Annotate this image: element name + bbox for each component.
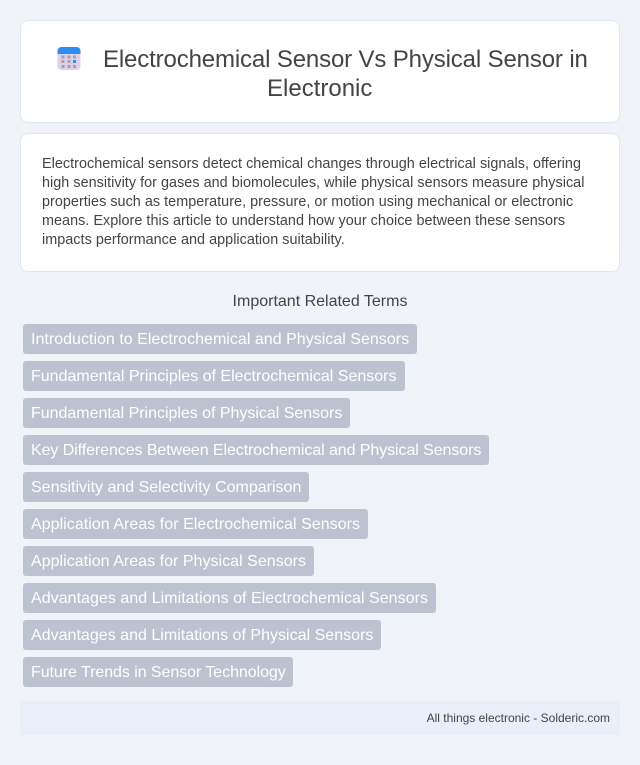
tag 2 — [23, 361, 405, 391]
tag 9 — [23, 620, 381, 650]
tag 8: Advantages and Limitations of Electrochemical Sensors — [31, 590, 428, 607]
tag 7: Application Areas for Physical Sensors — [31, 553, 306, 570]
list: related term tags — [23, 324, 489, 687]
panel: title card — [20, 20, 620, 123]
tag 2: Fundamental Principles of Electrochemical Sensors — [31, 368, 396, 385]
text block: intro: means. Explore this article to understand how your choice between these sensors — [42, 213, 565, 229]
tag 5: Sensitivity and Selectivity Comparison — [31, 479, 301, 496]
panel: intro card — [20, 133, 620, 272]
title: Electrochemical Sensor Vs Physical Sensor in — [103, 46, 588, 73]
tag 4 — [23, 435, 489, 465]
tag 10: Future Trends in Sensor Technology — [31, 664, 286, 681]
heading: related terms: Important Related Terms — [233, 293, 407, 310]
text block: intro — [42, 156, 584, 248]
tag 10 — [23, 657, 293, 687]
text block: intro: high sensitivity for gases and biomolecules, while physical sensors measure physical — [42, 175, 584, 191]
tag 3 — [23, 398, 350, 428]
footer — [20, 701, 620, 735]
title: Electronic — [267, 75, 372, 102]
title — [103, 46, 588, 102]
tag 5 — [23, 472, 309, 502]
text block: intro: impacts performance and application suitability. — [42, 232, 345, 248]
tag 8 — [23, 583, 436, 613]
tag 4: Key Differences Between Electrochemical and Physical Sensors — [31, 442, 481, 459]
text block: intro: Electrochemical sensors detect chemical changes through electrical signals, offering — [42, 156, 581, 172]
tag 6 — [23, 509, 368, 539]
footer: All things electronic - Solderic.com — [427, 711, 610, 725]
tag 3: Fundamental Principles of Physical Sensors — [31, 405, 342, 422]
text block: intro: properties such as temperature, pressure, or motion using mechanical or electronic — [42, 194, 573, 210]
icon: calendar — [58, 47, 80, 70]
tag 6: Application Areas for Electrochemical Sensors — [31, 516, 360, 533]
tag 1 — [23, 324, 417, 354]
tag 9: Advantages and Limitations of Physical Sensors — [31, 627, 373, 644]
tag 7 — [23, 546, 314, 576]
tag 1: Introduction to Electrochemical and Physical Sensors — [31, 331, 409, 348]
